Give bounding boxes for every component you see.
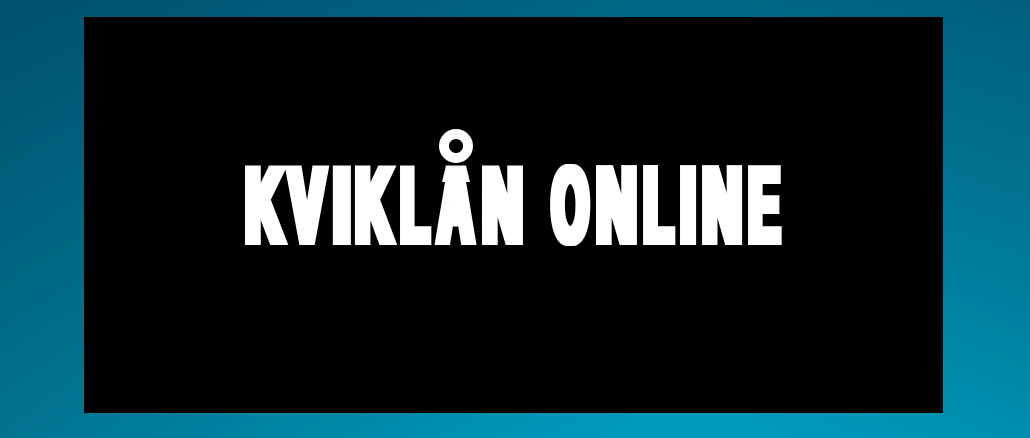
title: Kviklån Online: V — [289, 146, 325, 264]
title: Kviklån Online: I — [333, 146, 350, 264]
title: Kviklån Online: N — [703, 146, 741, 264]
title: Kviklån Online: L — [401, 146, 429, 264]
title: Kviklån Online: K — [246, 146, 283, 264]
title: Kviklån Online: E — [749, 146, 779, 264]
panel: black central rectangle — [84, 17, 943, 413]
title: Kviklån Online: L — [644, 146, 673, 264]
title: Kviklån Online: N — [483, 146, 522, 264]
title: Kviklån Online: N — [597, 146, 636, 264]
title: Kviklån Online: K — [356, 146, 392, 264]
title: Kviklån Online: O — [552, 146, 588, 264]
title: Kviklån Online: I — [681, 146, 695, 264]
title: Kviklån Online: Å — [438, 146, 473, 264]
title: Kviklån Online — [244, 129, 782, 246]
